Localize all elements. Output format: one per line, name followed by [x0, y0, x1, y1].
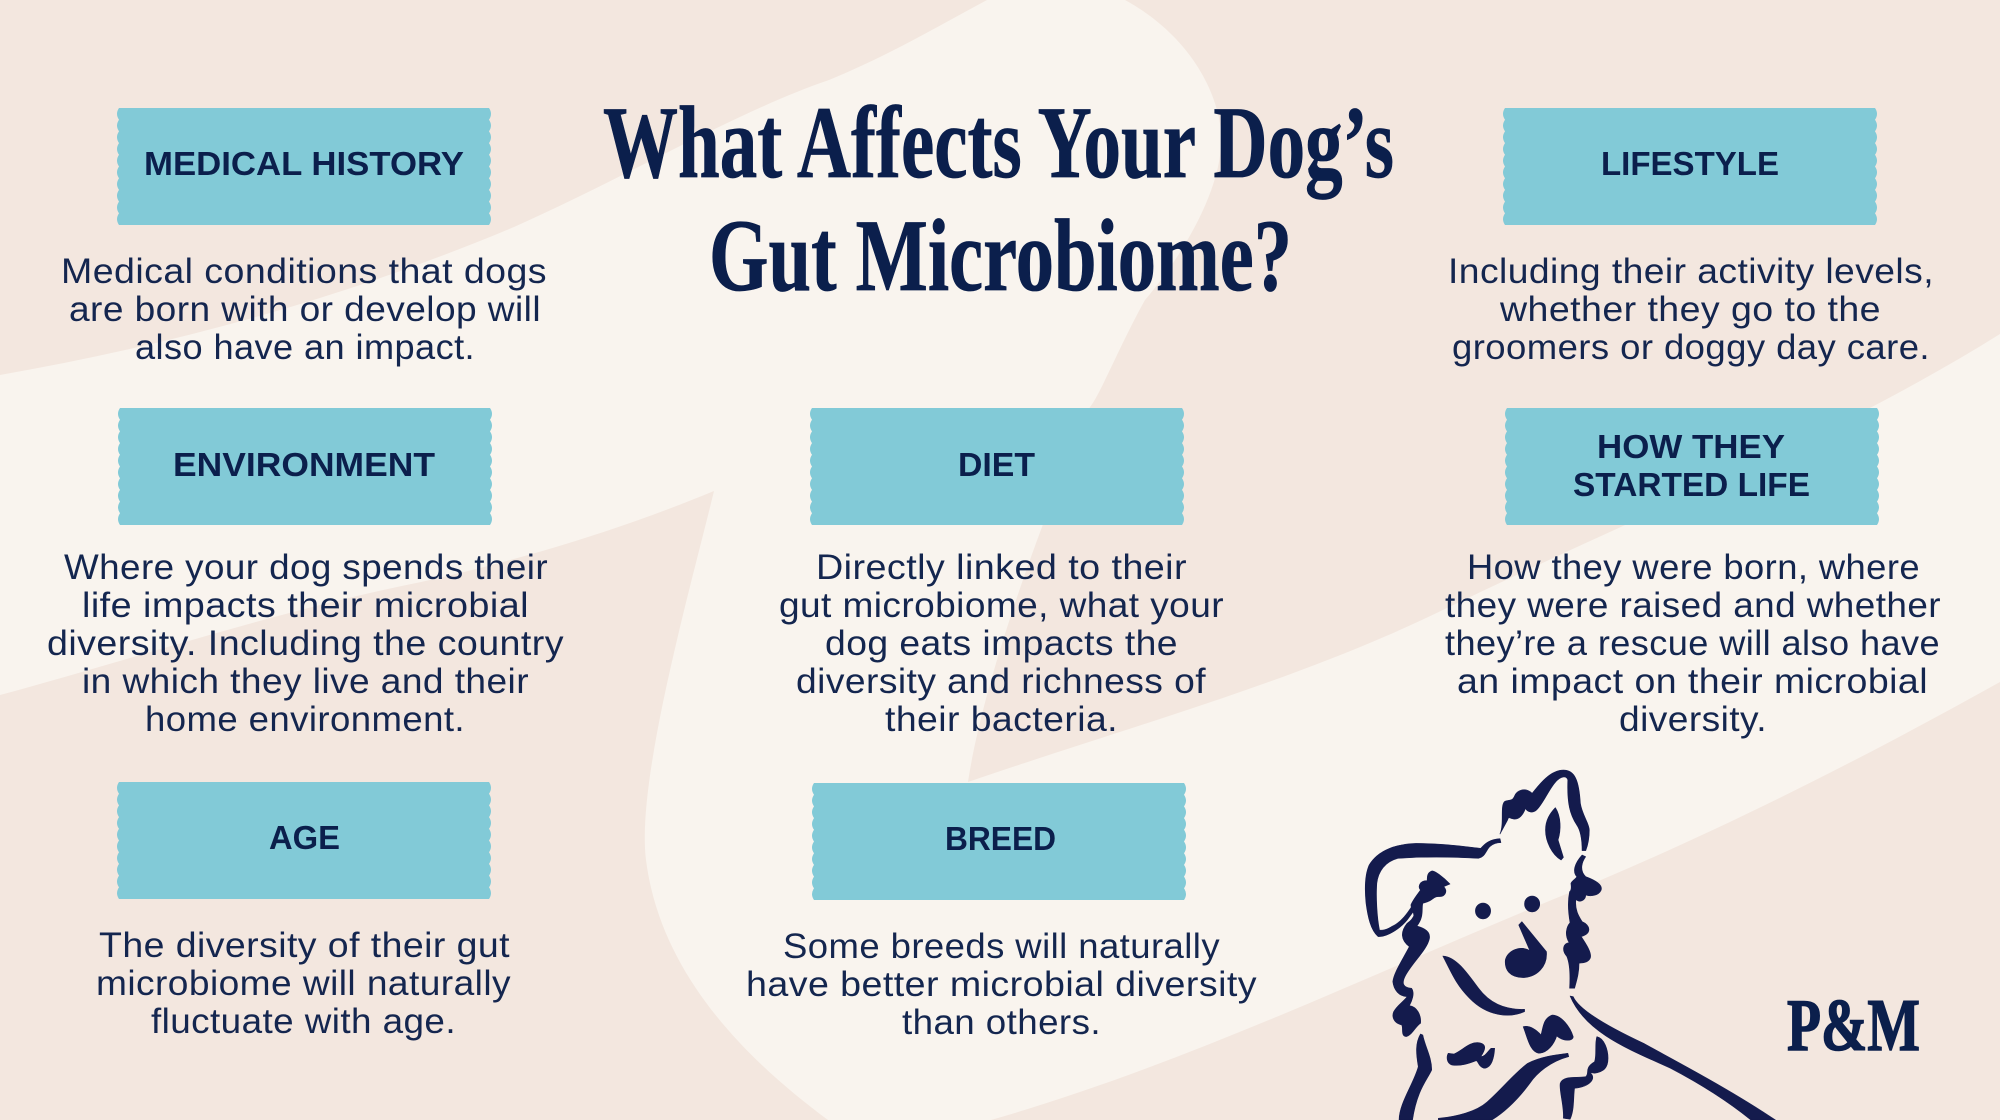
text: how they started life: they’re a rescue will also have: [1445, 624, 1940, 663]
badge: medical history: [117, 108, 491, 225]
panel: breed: [746, 783, 1257, 1042]
text: environment: [47, 548, 564, 739]
text: age: [96, 926, 511, 1041]
badge: medical history: MEDICAL HISTORY: [144, 145, 464, 182]
text: how they started life: diversity.: [1619, 700, 1767, 739]
text: breed: Some breeds will naturally: [783, 927, 1220, 966]
badge: environment: [118, 408, 492, 525]
text: diet: their bacteria.: [885, 700, 1118, 739]
badge: diet: [810, 408, 1184, 525]
panel: how they started life: [1445, 408, 1941, 739]
badge: age: AGE: [269, 819, 340, 856]
text: age: fluctuate with age.: [151, 1002, 456, 1041]
text: environment: home environment.: [145, 700, 465, 739]
text: how they started life: an impact on their microbial: [1457, 662, 1928, 701]
text: breed: have better microbial diversity: [746, 965, 1257, 1004]
text: lifestyle: Including their activity levels,: [1448, 252, 1934, 291]
text: diet: [779, 548, 1224, 739]
text: how they started life: How they were born, where: [1467, 548, 1920, 587]
panel: medical history: [61, 108, 547, 367]
badge: diet: DIET: [958, 446, 1035, 483]
panel: age: [96, 782, 511, 1041]
panel: lifestyle: [1448, 108, 1934, 367]
text: breed: [746, 927, 1257, 1042]
text: breed: than others.: [902, 1003, 1101, 1042]
text: medical history: Medical conditions that dogs: [61, 252, 547, 291]
text: environment: diversity. Including the country: [47, 624, 564, 663]
icon: dog illustration: [1365, 770, 1775, 1120]
text: lifestyle: whether they go to the: [1499, 290, 1881, 329]
badge: breed: [812, 783, 1186, 900]
text: diet: dog eats impacts the: [825, 624, 1178, 663]
text: lifestyle: groomers or doggy day care.: [1452, 328, 1930, 367]
badge: environment: ENVIRONMENT: [173, 446, 435, 483]
text: environment: life impacts their microbial: [82, 586, 529, 625]
text: medical history: are born with or develop will: [69, 290, 541, 329]
text: diet: gut microbiome, what your: [779, 586, 1224, 625]
badge: lifestyle: LIFESTYLE: [1601, 145, 1779, 182]
text: diet: diversity and richness of: [796, 662, 1206, 701]
text: age: The diversity of their gut: [99, 926, 510, 965]
badge: lifestyle: [1503, 108, 1877, 225]
text: medical history: [61, 252, 547, 367]
text: lifestyle: [1448, 252, 1934, 367]
text: medical history: also have an impact.: [135, 328, 475, 367]
logo: P&M: P&M: [1787, 985, 1920, 1067]
panel: environment: [47, 408, 564, 739]
text: age: microbiome will naturally: [96, 964, 511, 1003]
text: environment: in which they live and their: [82, 662, 529, 701]
text: how they started life: they were raised and whether: [1445, 586, 1941, 625]
badge: breed: BREED: [945, 820, 1056, 857]
panel: diet: [779, 408, 1224, 739]
badge: age: [117, 782, 491, 899]
text: environment: Where your dog spends their: [64, 548, 548, 587]
title: What Affects Your Dog’s: [603, 86, 1394, 200]
text: how they started life: [1445, 548, 1941, 739]
badge: how they started life: [1505, 408, 1879, 525]
text: diet: Directly linked to their: [816, 548, 1187, 587]
badge: how they started life: STARTED LIFE: [1573, 466, 1810, 503]
title: [603, 86, 1394, 313]
title: Gut Microbiome?: [709, 199, 1292, 313]
badge: how they started life: HOW THEY: [1597, 428, 1785, 465]
